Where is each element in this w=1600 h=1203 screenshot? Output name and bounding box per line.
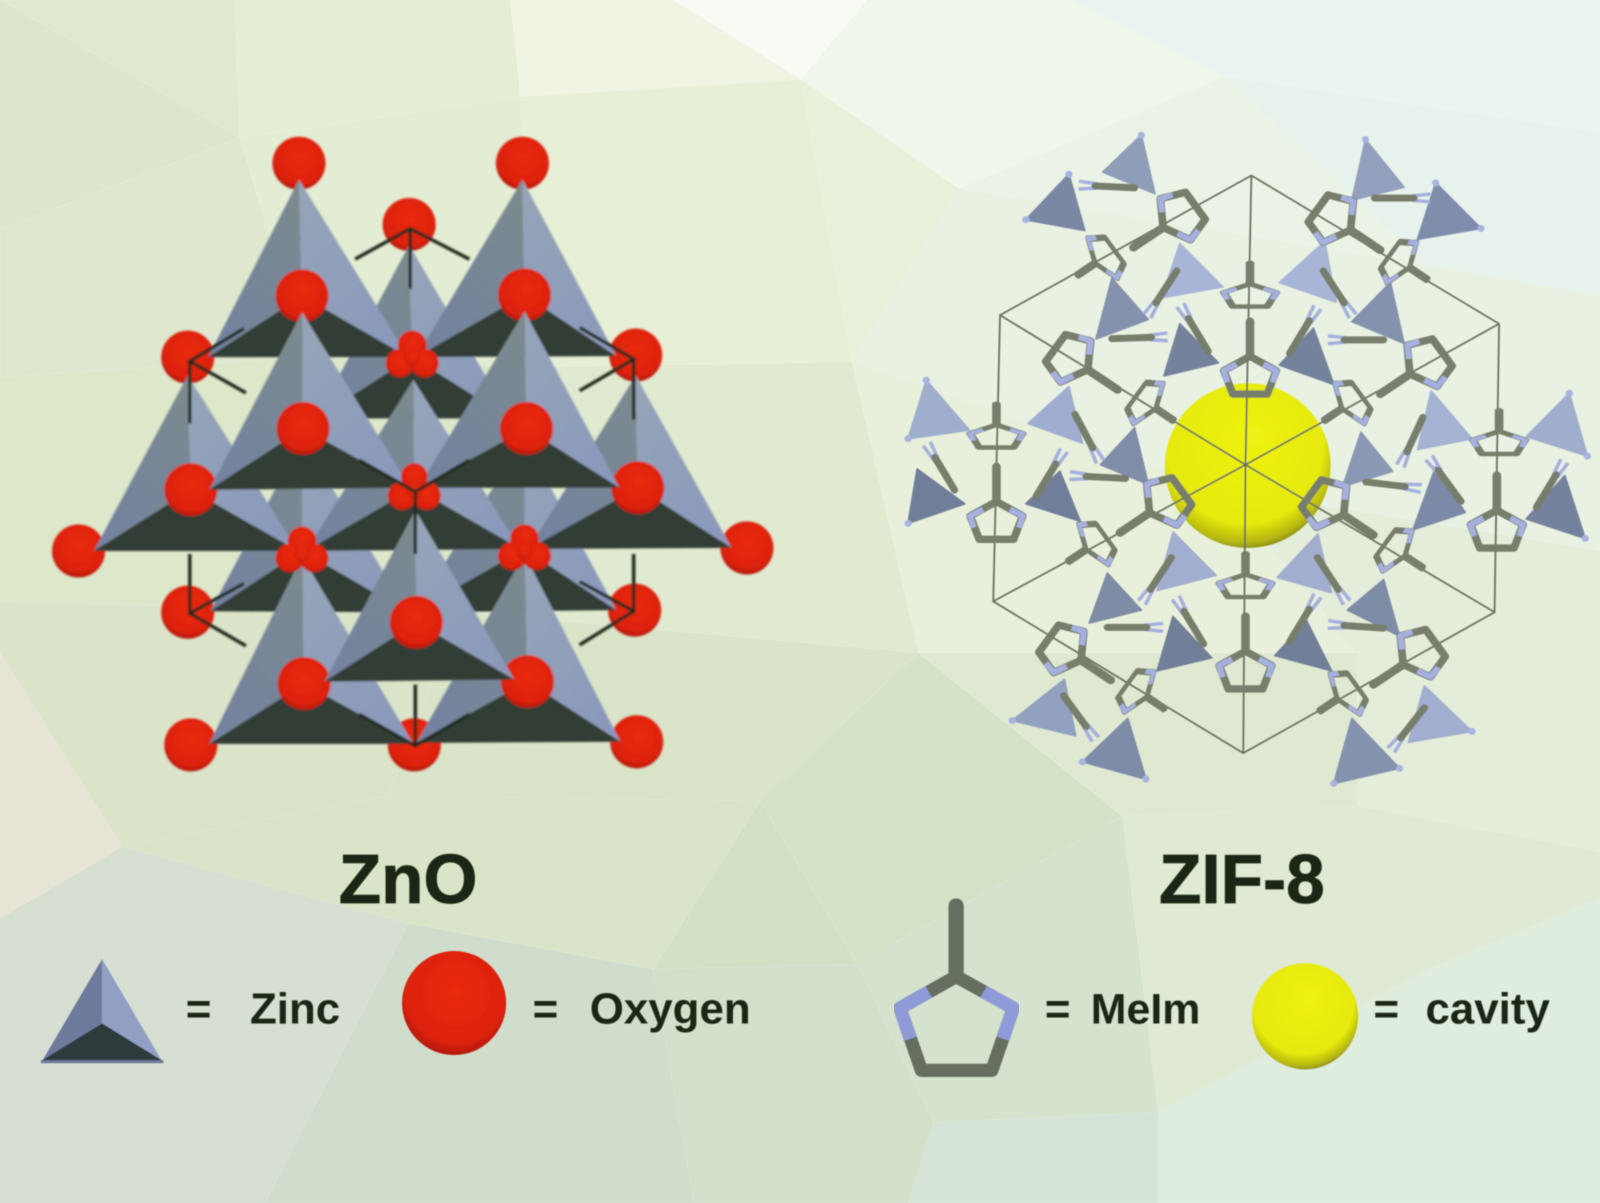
upper tetrahedra — [208, 180, 616, 357]
back tetrahedra — [210, 245, 616, 612]
zinc tetrahedra — [908, 135, 1587, 783]
legend sign: oxygen equals: = — [533, 984, 558, 1033]
2-methylimidazole linker rings — [970, 185, 1525, 731]
cavity sphere — [1165, 383, 1331, 548]
side-on linkers — [923, 181, 1568, 753]
chart: ZIF-8 framework structure with cavity — [904, 132, 1591, 787]
corner oxygen atoms — [52, 137, 773, 771]
legend text: MeIm: MeIm — [1091, 985, 1200, 1033]
legend sign: cavity equals: = — [1373, 984, 1399, 1033]
legend sign: zinc equals: = — [186, 984, 211, 1033]
legend: zinc tetrahedron icon — [41, 959, 163, 1063]
front upper tetrahedra — [209, 311, 619, 490]
lower tetrahedra — [209, 554, 620, 744]
outer nitrogen tips — [904, 132, 1591, 787]
heading: ZIF-8: ZIF-8 — [1159, 840, 1325, 918]
heading: ZnO: ZnO — [339, 840, 478, 918]
unit cell wireframe — [190, 229, 634, 746]
chart: ZnO tetrahedral crystal structure — [52, 137, 773, 771]
overlapping oxygen clusters — [276, 331, 551, 572]
legend text: cavity: cavity — [1426, 984, 1550, 1033]
legend: 2-methylimidazole icon — [900, 906, 1013, 1070]
legend: oxygen sphere icon — [402, 951, 506, 1055]
unit cell wireframe — [993, 176, 1499, 753]
legend text: Oxygen: Oxygen — [590, 984, 751, 1033]
frontmost tetrahedron — [324, 510, 514, 682]
legend: cavity sphere icon — [1252, 963, 1358, 1069]
legend sign: MeIm equals: = — [1045, 984, 1071, 1033]
middle layer tetrahedra — [94, 375, 732, 551]
legend text: Zinc: Zinc — [250, 984, 340, 1033]
